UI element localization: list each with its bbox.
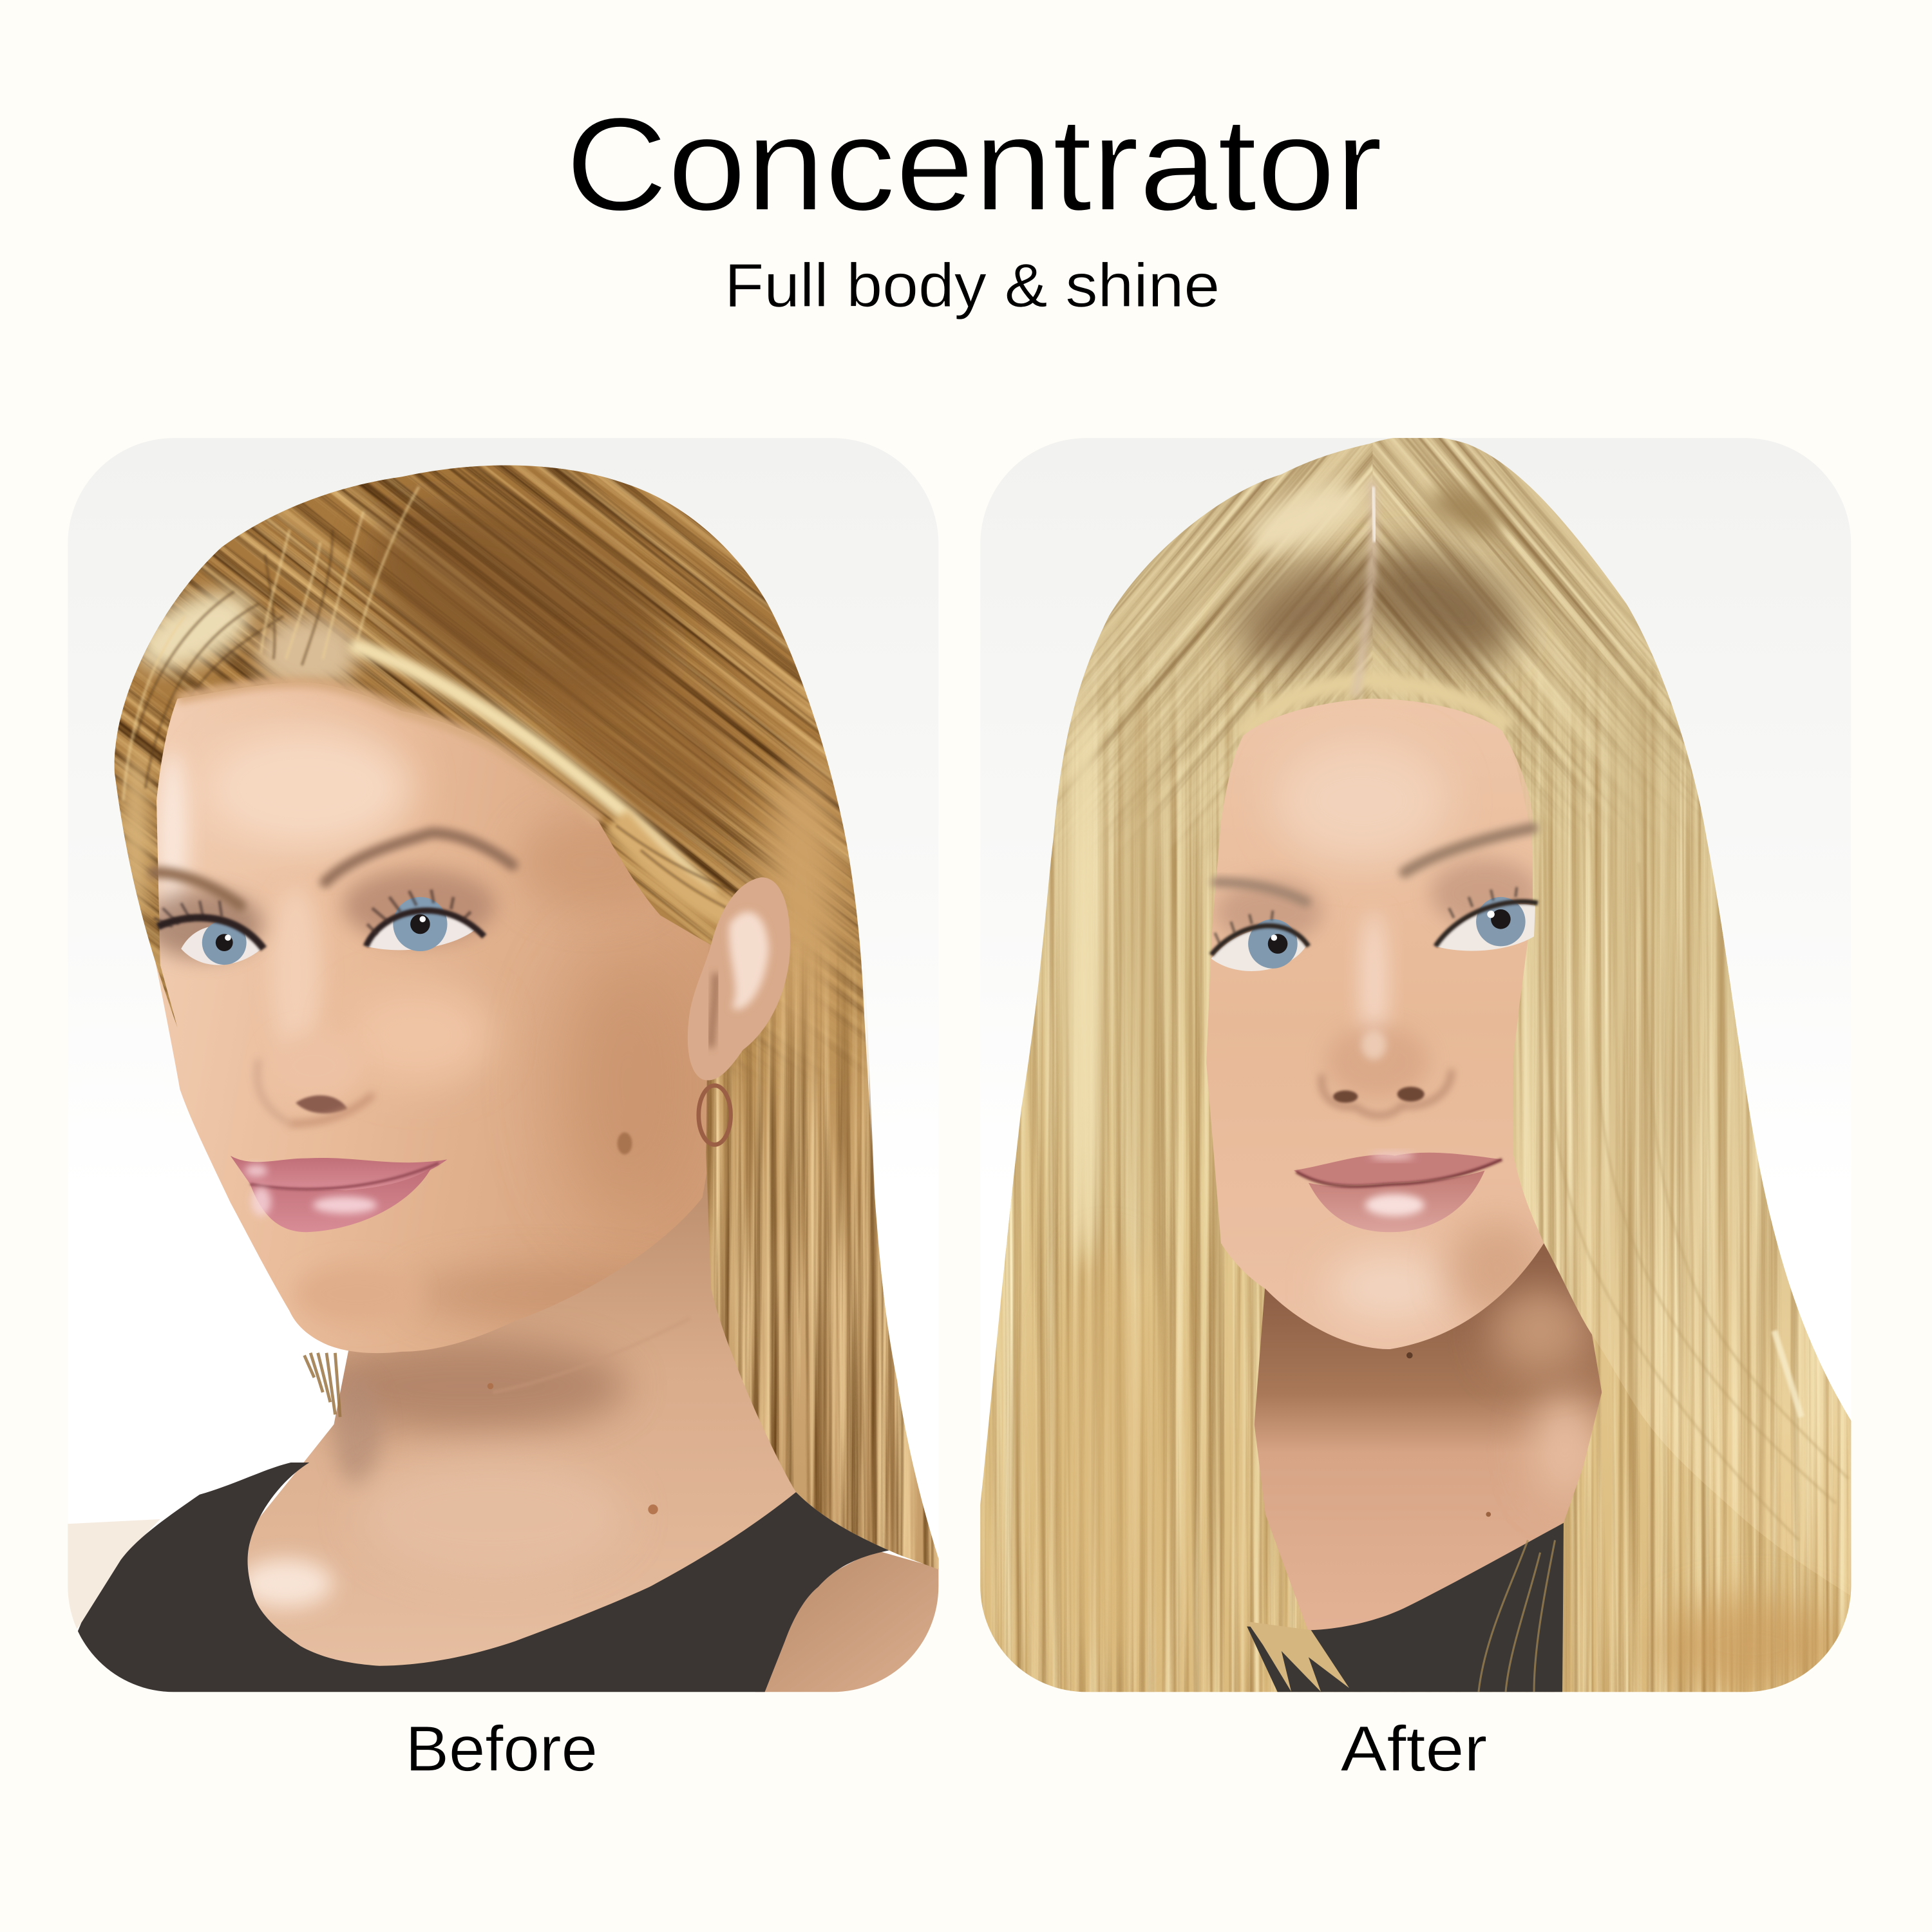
soft hairline bbox=[178, 683, 599, 822]
hair bbox=[0, 0, 1320, 1571]
earring bbox=[699, 1086, 731, 1144]
neck bbox=[247, 1173, 796, 1666]
left lock tips bbox=[1247, 1622, 1349, 1692]
lower hair texture bbox=[706, 936, 943, 1571]
hair roots bbox=[1219, 537, 1393, 683]
label: after: After bbox=[1341, 1713, 1487, 1785]
panel background bbox=[980, 437, 1852, 1693]
left shoulder bbox=[68, 1519, 160, 1629]
diagonal hair texture bbox=[0, 0, 1320, 1494]
strands over top bbox=[1479, 1540, 1555, 1692]
vertical hair texture bbox=[973, 431, 1861, 1700]
panel: before photo bbox=[68, 438, 939, 1692]
stray hair under jaw bbox=[305, 1353, 340, 1417]
black top bbox=[50, 1463, 897, 1700]
face bbox=[135, 641, 752, 1368]
eye: right bbox=[1435, 887, 1538, 951]
panel background bbox=[68, 438, 938, 750]
eye: right bbox=[366, 889, 484, 951]
lips bbox=[231, 1156, 448, 1232]
subtitle: Full body & shine bbox=[724, 251, 1220, 320]
title: Concentrator bbox=[565, 90, 1383, 238]
eyebrows bbox=[154, 833, 513, 905]
eyebrows bbox=[1216, 828, 1533, 902]
face bbox=[1195, 690, 1565, 1356]
mole bbox=[618, 1132, 632, 1155]
nose bbox=[1321, 1025, 1452, 1115]
neck bbox=[1244, 1232, 1614, 1651]
nose bbox=[257, 1031, 374, 1124]
lips bbox=[1294, 1152, 1502, 1232]
hair parting bbox=[1356, 480, 1374, 696]
ear bbox=[688, 877, 790, 1081]
label: before: Before bbox=[405, 1713, 598, 1785]
lower right golden hair bbox=[1657, 1596, 1842, 1694]
right shoulder bbox=[755, 1552, 939, 1692]
eye: left bbox=[154, 901, 263, 965]
infographic canvas bbox=[68, 118, 1851, 1771]
black top bbox=[1247, 1523, 1564, 1700]
eye: left bbox=[1211, 911, 1309, 971]
big right lock bbox=[1497, 708, 1861, 1602]
